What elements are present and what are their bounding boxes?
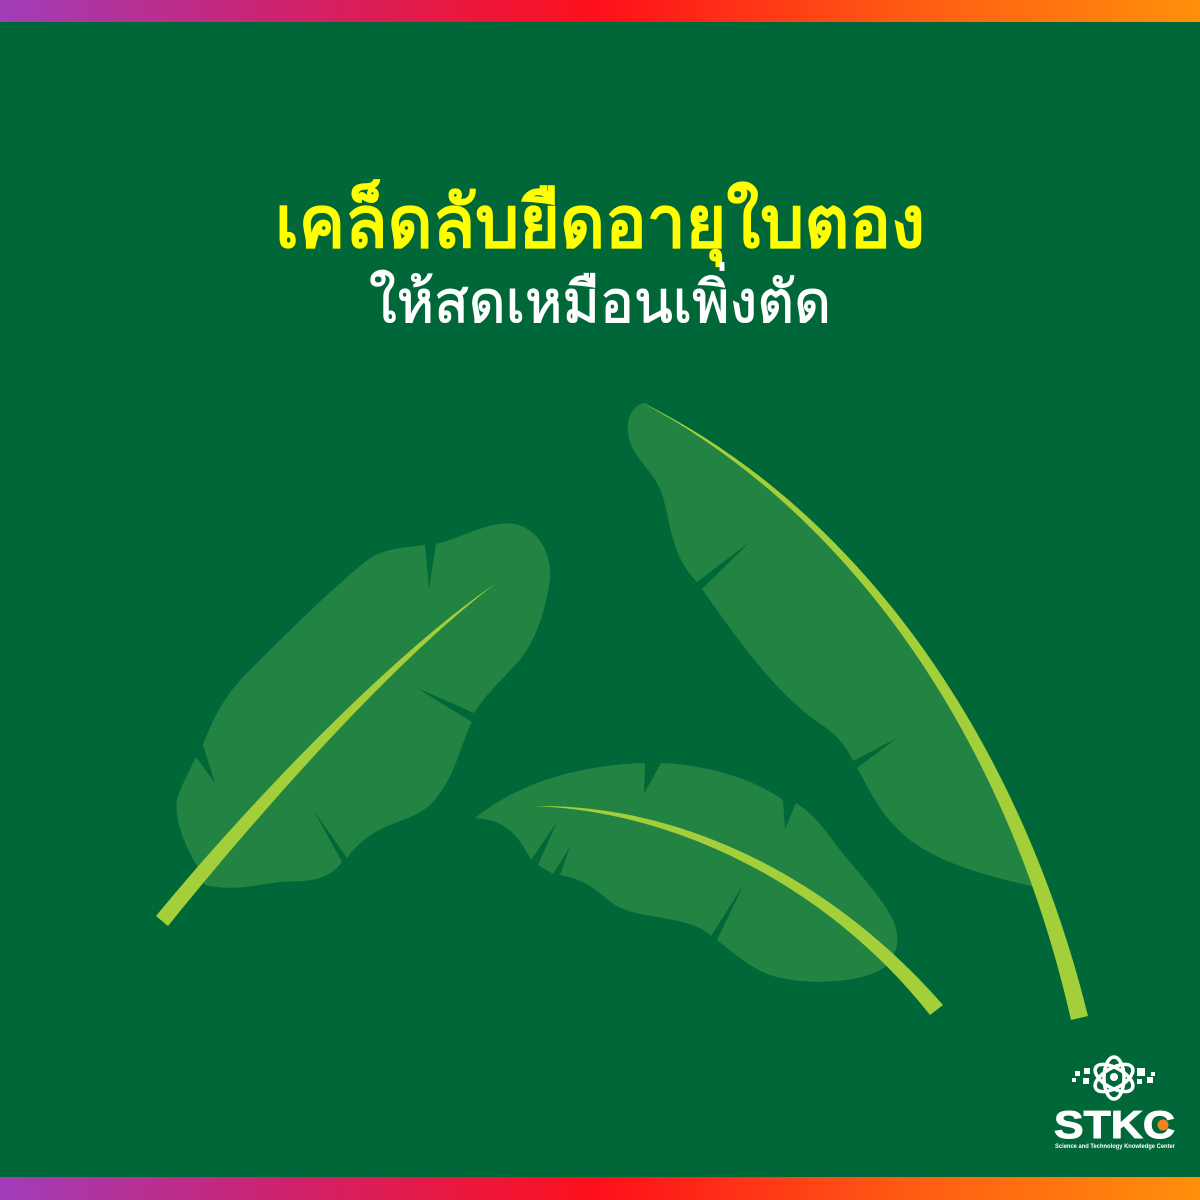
bottom gradient bar <box>0 1177 1200 1200</box>
top gradient bar <box>0 0 1200 22</box>
leaf: left <box>156 523 550 926</box>
title: เคล็ดลับยืดอายุใบตอง <box>275 179 925 268</box>
logo icon: atom <box>1091 1057 1137 1099</box>
leaf: right <box>628 403 1088 1020</box>
logo tagline: Science and Technology Knowledge Center <box>1055 1144 1176 1150</box>
leaf: bottom <box>475 763 943 1015</box>
subtitle: ให้สดเหมือนเพิ่งตัด <box>369 262 831 335</box>
logo orange dot <box>1158 1120 1168 1130</box>
logo: STKC <box>1054 1057 1176 1150</box>
logo icon: pixel squares <box>1072 1068 1155 1084</box>
logo wordmark: STKC <box>1054 1104 1175 1147</box>
